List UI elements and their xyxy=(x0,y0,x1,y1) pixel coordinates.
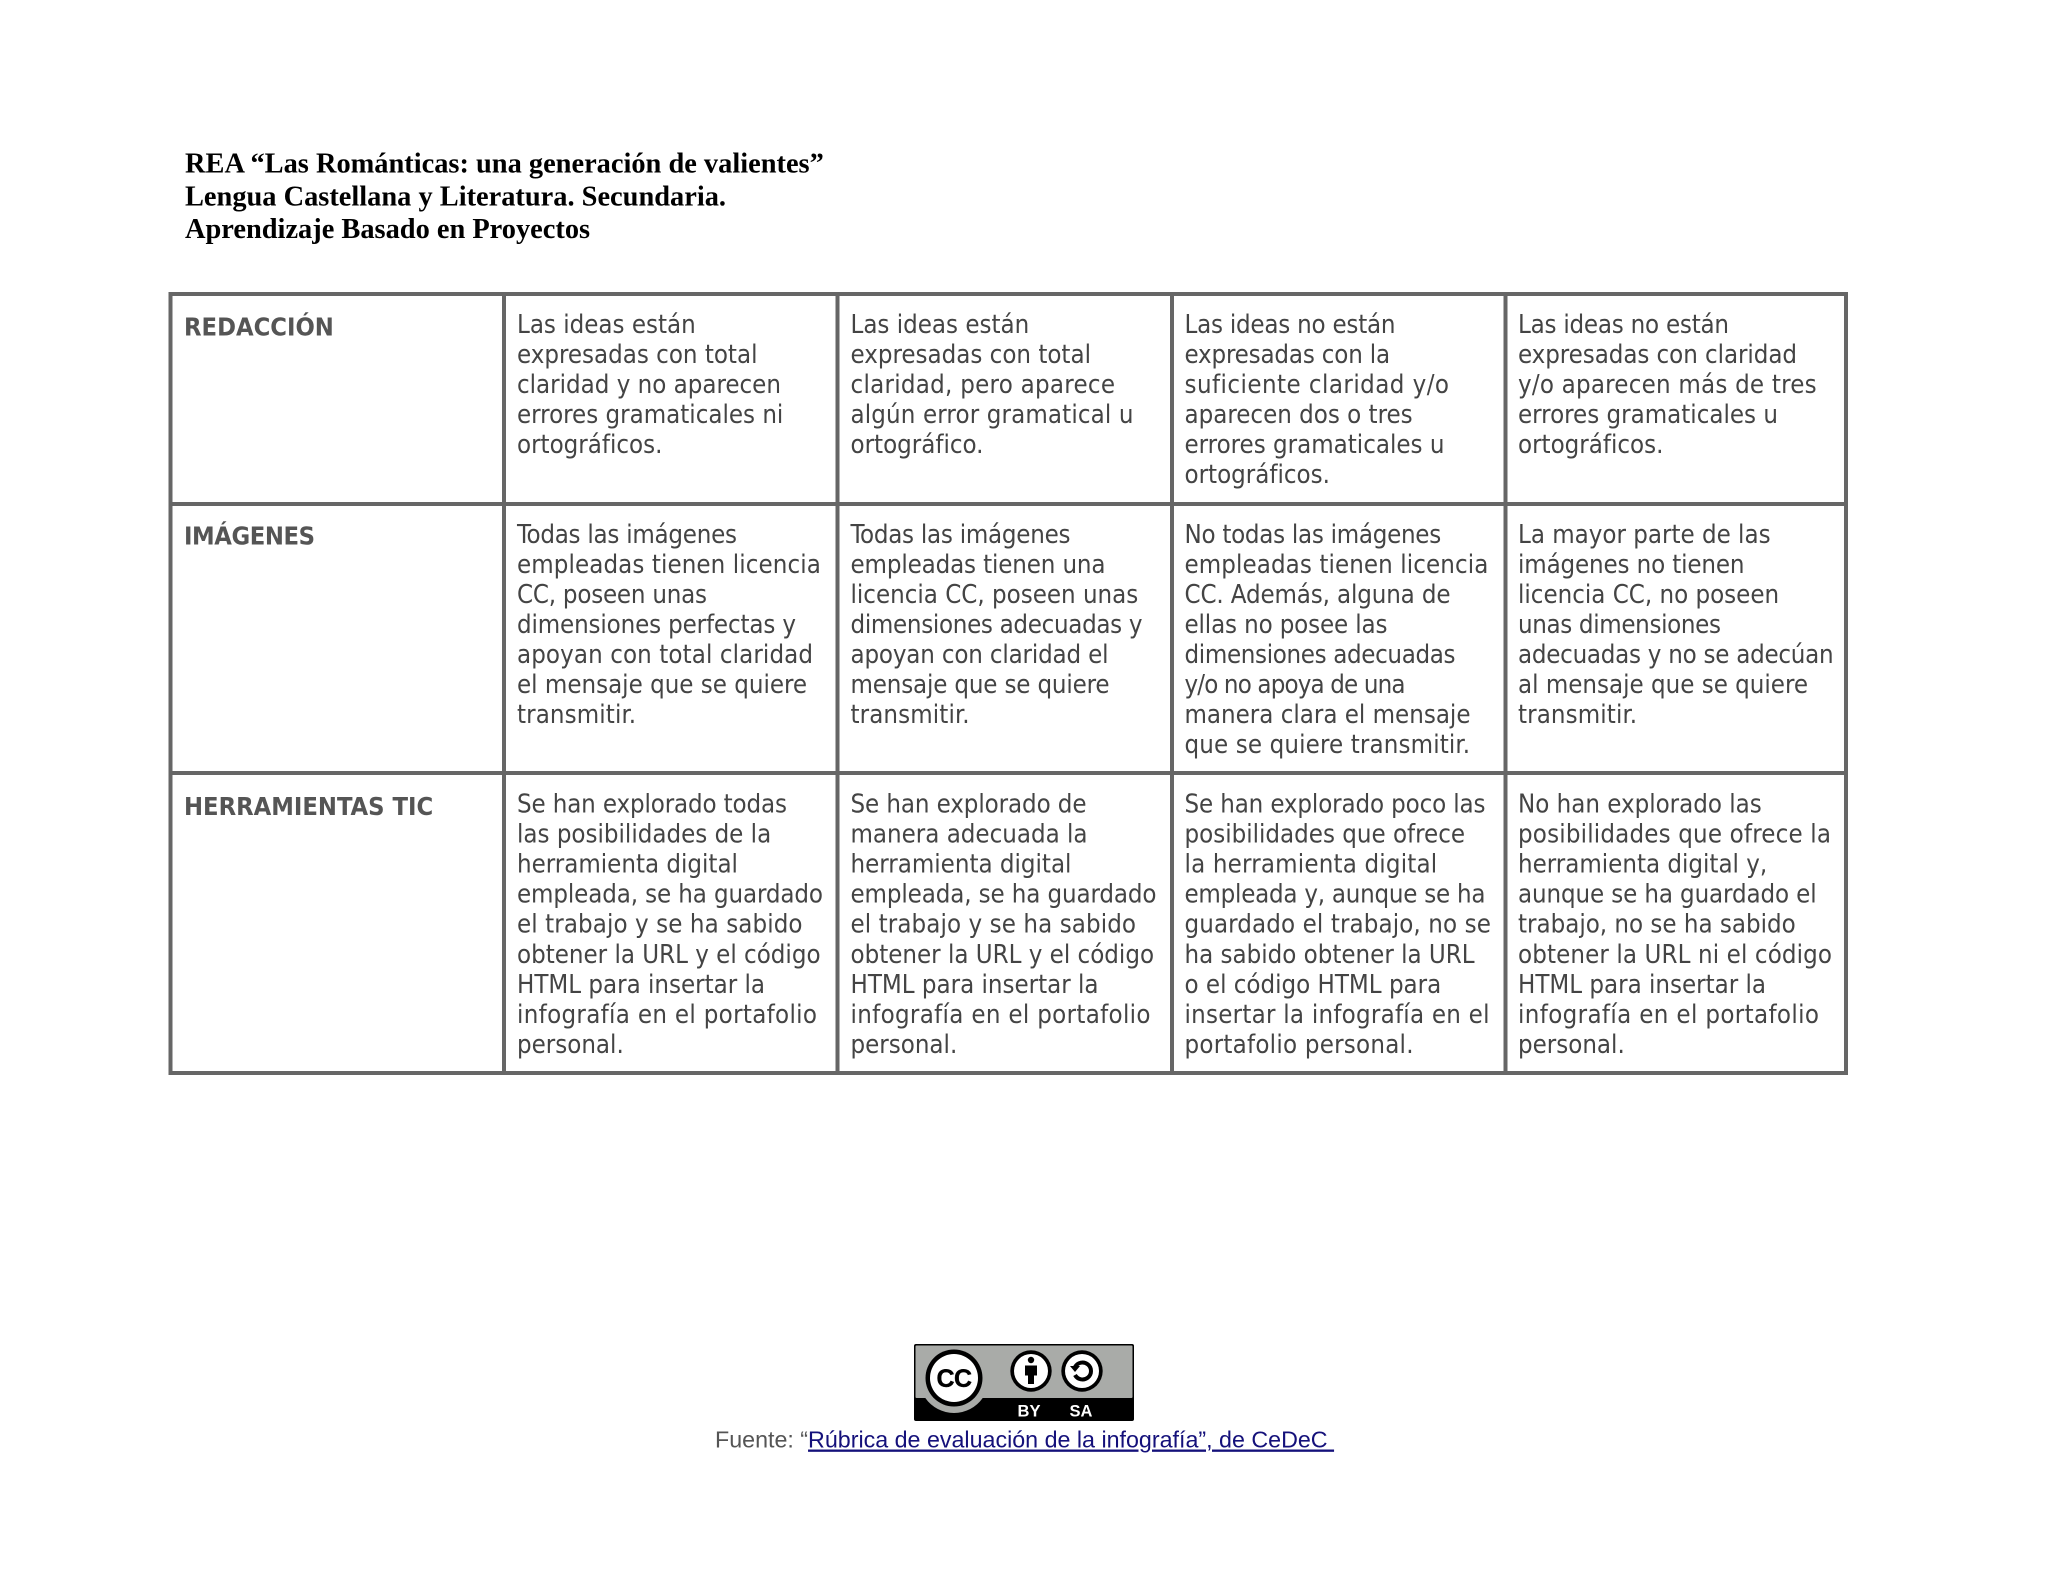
cell: herramientas level 4: personal. xyxy=(1518,1030,1625,1060)
cell: redacción level 1: errores gramaticales ni xyxy=(517,400,783,430)
cell: redacción level 2: claridad, pero aparece xyxy=(850,370,1115,400)
cell: imágenes level 1: empleadas tienen licencia xyxy=(517,550,821,580)
icon: Creative Commons BY-SA badge xyxy=(914,1344,1134,1421)
cell: herramientas level 2: obtener la URL y el código xyxy=(850,940,1154,970)
row: imágenes xyxy=(184,520,1834,760)
cell: redacción level 3: ortográficos. xyxy=(1184,460,1330,490)
cell: herramientas level 2: Se han explorado de xyxy=(850,789,1086,819)
cell: herramientas level 4: herramienta digital y, xyxy=(1518,850,1767,880)
cell: redacción level 2: algún error gramatical u xyxy=(850,400,1134,430)
cell: imágenes level 3: ellas no posee las xyxy=(1184,610,1388,640)
cell: imágenes level 4: imágenes no tienen xyxy=(1518,550,1744,580)
row: herramientas TIC xyxy=(184,789,1832,1060)
cell: herramientas level 1: el trabajo y se ha sabido xyxy=(517,910,802,940)
cell: herramientas level 2: personal. xyxy=(850,1030,957,1060)
cell: imágenes level 1: CC, poseen unas xyxy=(517,580,707,610)
cell: herramientas level 3: Se han explorado poco las xyxy=(1184,789,1486,819)
cell: herramientas level 3: posibilidades que ofrece xyxy=(1184,819,1465,849)
cell: herramientas level 2: empleada, se ha guardado xyxy=(850,880,1156,910)
cell: herramientas level 1: infografía en el portafolio xyxy=(517,1000,817,1030)
cell: imágenes level 3: No todas las imágenes xyxy=(1184,520,1441,550)
rubric table xyxy=(170,294,1846,1073)
cell: imágenes level 2: apoyan con claridad el xyxy=(850,640,1108,670)
cell: imágenes level 1: el mensaje que se quiere xyxy=(517,670,807,700)
cell: redacción level 1: ortográficos. xyxy=(517,430,662,460)
cell: herramientas level 4: aunque se ha guardado el xyxy=(1518,880,1817,910)
cell: imágenes level 2: transmitir. xyxy=(850,700,970,730)
title: Aprendizaje Basado en Proyectos xyxy=(185,214,590,245)
cell: herramientas level 2: el trabajo y se ha sabido xyxy=(850,910,1136,940)
cell: imágenes level 2: mensaje que se quiere xyxy=(850,670,1110,700)
cell: herramientas level 1: las posibilidades de la xyxy=(517,819,771,849)
cell: redacción level 2: ortográfico. xyxy=(850,430,983,460)
cell: herramientas level 1: Se han explorado todas xyxy=(517,789,787,819)
cell: herramientas level 3: empleada y, aunque se ha xyxy=(1184,880,1486,910)
cell: imágenes level 1: transmitir. xyxy=(517,700,636,730)
cell: imágenes level 3: CC. Además, alguna de xyxy=(1184,580,1450,610)
icon: Creative Commons BY-SA badge: BY xyxy=(1018,1402,1040,1420)
cell: redacción level 1: claridad y no aparecen xyxy=(517,370,781,400)
cell: herramientas level 1: obtener la URL y el código xyxy=(517,940,821,970)
cell: herramientas level 2: infografía en el portafolio xyxy=(850,1000,1150,1030)
cell: redacción level 3: expresadas con la xyxy=(1184,340,1390,370)
cell: redacción level 4: Las ideas no están xyxy=(1518,310,1729,340)
cell: redacción level 4: ortográficos. xyxy=(1518,430,1663,460)
cell: imágenes level 2: dimensiones adecuadas y xyxy=(850,610,1142,640)
cell: redacción level 1: Las ideas están xyxy=(517,310,696,340)
table grid xyxy=(170,294,1846,1073)
cell: redacción level 1: expresadas con total xyxy=(517,340,757,370)
cell: imágenes level 4: transmitir. xyxy=(1518,700,1637,730)
cell: imágenes level 4: licencia CC, no poseen xyxy=(1518,580,1779,610)
cell: herramientas level 1: HTML para insertar la xyxy=(517,970,765,1000)
cell: imágenes level 4: unas dimensiones xyxy=(1518,610,1721,640)
source credit: Fuente: “Rúbrica de evaluación de la infografía”, de CeDeC xyxy=(715,1426,1334,1452)
cell: redacción level 2: Las ideas están xyxy=(850,310,1029,340)
cell: herramientas level 4: No han explorado las xyxy=(1518,789,1762,819)
cell: redacción level 4: y/o aparecen más de tres xyxy=(1518,370,1817,400)
cell: imágenes level 4: La mayor parte de las xyxy=(1518,520,1771,550)
cell: herramientas level 1: herramienta digital xyxy=(517,850,738,880)
cell: herramientas level 3: la herramienta digital xyxy=(1184,850,1437,880)
cell: redacción level 4: expresadas con claridad xyxy=(1518,340,1797,370)
cell: imágenes level 3: manera clara el mensaje xyxy=(1184,700,1470,730)
cell: imágenes level 1: apoyan con total claridad xyxy=(517,640,813,670)
title xyxy=(185,148,824,245)
cell: herramientas level 3: insertar la infografía en el xyxy=(1184,1000,1490,1030)
cell: imágenes level 3: empleadas tienen licencia xyxy=(1184,550,1488,580)
cell: imágenes level 3: dimensiones adecuadas xyxy=(1184,640,1456,670)
cell: redacción level 3: aparecen dos o tres xyxy=(1184,400,1413,430)
row heading: redacción: REDACCIÓN xyxy=(184,312,334,342)
cell: herramientas level 4: infografía en el portafolio xyxy=(1518,1000,1819,1030)
cell: redacción level 2: expresadas con total xyxy=(850,340,1091,370)
cell: imágenes level 3: que se quiere transmitir. xyxy=(1184,730,1470,760)
cell: herramientas level 4: HTML para insertar la xyxy=(1518,970,1766,1000)
cell: imágenes level 2: Todas las imágenes xyxy=(850,520,1070,550)
cell: imágenes level 4: adecuadas y no se adecúan xyxy=(1518,640,1834,670)
cell: imágenes level 3: y/o no apoya de una xyxy=(1184,670,1406,700)
cell: imágenes level 2: licencia CC, poseen unas xyxy=(850,580,1138,610)
cell: imágenes level 1: Todas las imágenes xyxy=(516,520,737,550)
cell: redacción level 4: errores gramaticales u xyxy=(1518,400,1778,430)
row: redacción xyxy=(184,310,1817,490)
cell: herramientas level 1: personal. xyxy=(517,1030,624,1060)
cell: herramientas level 2: HTML para insertar la xyxy=(850,970,1099,1000)
cell: redacción level 3: Las ideas no están xyxy=(1184,310,1396,340)
cell: herramientas level 2: herramienta digital xyxy=(850,850,1071,880)
title: Lengua Castellana y Literatura. Secundaria. xyxy=(185,182,726,212)
cell: herramientas level 3: guardado el trabajo, no se xyxy=(1184,910,1491,940)
cell: herramientas level 2: manera adecuada la xyxy=(850,819,1088,849)
cell: herramientas level 4: obtener la URL ni el código xyxy=(1518,940,1832,970)
cell: imágenes level 4: al mensaje que se quiere xyxy=(1518,670,1808,700)
cell: herramientas level 3: o el código HTML para xyxy=(1184,970,1441,1000)
cell: herramientas level 3: portafolio personal. xyxy=(1184,1030,1414,1060)
cell: imágenes level 2: empleadas tienen una xyxy=(850,550,1106,580)
cell: herramientas level 4: posibilidades que ofrece la xyxy=(1518,819,1831,849)
cell: herramientas level 1: empleada, se ha guardado xyxy=(517,880,823,910)
cell: redacción level 3: suficiente claridad y/o xyxy=(1184,370,1449,400)
cell: herramientas level 4: trabajo, no se ha sabido xyxy=(1518,910,1796,940)
cell: herramientas level 3: ha sabido obtener la URL xyxy=(1184,940,1475,970)
row heading: imágenes: IMÁGENES xyxy=(184,522,315,550)
cell: imágenes level 1: dimensiones perfectas y xyxy=(517,610,796,640)
cell: redacción level 3: errores gramaticales u xyxy=(1184,430,1444,460)
row heading: herramientas TIC: HERRAMIENTAS TIC xyxy=(184,792,433,821)
title: REA “Las Románticas: una generación de valientes” xyxy=(185,148,824,180)
icon: Creative Commons BY-SA badge: SA xyxy=(1070,1402,1093,1420)
icon: Creative Commons BY-SA badge: CC xyxy=(936,1365,972,1393)
